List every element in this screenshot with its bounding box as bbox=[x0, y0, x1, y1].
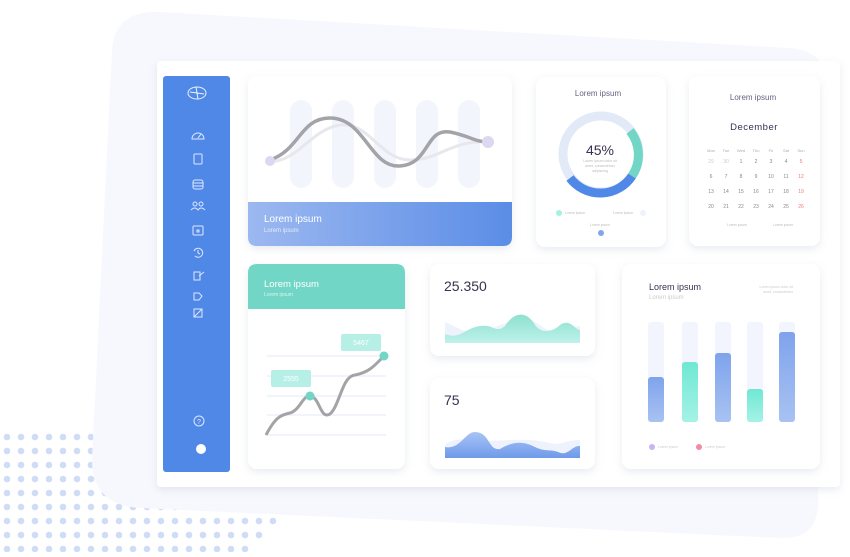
card: calendar: 21 bbox=[723, 204, 729, 210]
card: calendar: 12 bbox=[798, 174, 804, 180]
card: green line chart: Lorem ipsum bbox=[264, 279, 319, 290]
card: calendar: 7 bbox=[725, 174, 728, 180]
card: calendar: 17 bbox=[768, 189, 774, 195]
card: 25.350 area bbox=[430, 264, 595, 356]
card: calendar: Lorem ipsum bbox=[773, 223, 793, 227]
card: bar chart: Lorem ipsum bbox=[705, 445, 725, 449]
card: bar chart: Lorem ipsum dolor sit bbox=[760, 285, 793, 289]
dot pattern bbox=[0, 433, 280, 552]
card: calendar: 30 bbox=[723, 159, 729, 165]
card: line chart top: Lorem ipsum bbox=[264, 228, 299, 234]
card: calendar: 26 bbox=[798, 204, 804, 210]
card: calendar: 24 bbox=[768, 204, 774, 210]
card: calendar: 16 bbox=[753, 189, 759, 195]
icon: logo bbox=[188, 87, 206, 99]
icon: dot bbox=[196, 444, 206, 454]
card: calendar: 20 bbox=[708, 204, 714, 210]
card: donut: Lorem ipsum bbox=[613, 211, 633, 215]
card: calendar: 14 bbox=[723, 189, 729, 195]
card: calendar: 29 bbox=[708, 159, 714, 165]
sidebar bbox=[163, 76, 230, 472]
card: donut: Lorem ipsum dolor sit bbox=[583, 159, 617, 163]
card: calendar: Sun bbox=[797, 148, 805, 153]
dashboard frame bbox=[157, 61, 840, 487]
card: calendar: Lorem ipsum bbox=[727, 223, 747, 227]
card: calendar: 19 bbox=[798, 189, 804, 195]
card: calendar: 6 bbox=[710, 174, 713, 180]
text: card title: Lorem ipsum bbox=[264, 214, 322, 225]
card: donut: 45% bbox=[586, 142, 614, 158]
card: calendar: Tue bbox=[723, 148, 730, 153]
card: donut: Lorem ipsum bbox=[565, 211, 585, 215]
card: bar chart bbox=[622, 264, 820, 469]
card: bar chart: amet, consectetuer bbox=[763, 290, 794, 294]
card: calendar: 25 bbox=[783, 204, 789, 210]
card: donut: adipiscing bbox=[592, 169, 608, 173]
card: donut bbox=[536, 77, 666, 247]
card: calendar: 2 bbox=[755, 159, 758, 165]
card: calendar: Mon bbox=[707, 148, 715, 153]
card: 25.350 area: 25.350 bbox=[444, 278, 487, 294]
card: calendar: 1 bbox=[740, 159, 743, 165]
card: calendar: Sat bbox=[783, 148, 790, 153]
card: calendar: 15 bbox=[738, 189, 744, 195]
card: 75 area bbox=[430, 378, 595, 469]
icon: help bbox=[194, 416, 204, 426]
card: green line chart bbox=[248, 264, 405, 469]
card: bar chart: Lorem ipsum bbox=[649, 282, 701, 292]
card: calendar: 3 bbox=[770, 159, 773, 165]
card: calendar: 11 bbox=[783, 174, 789, 180]
card: calendar: December bbox=[730, 122, 778, 133]
card: bar chart: Lorem ipsum bbox=[649, 295, 684, 301]
card: donut: Lorem ipsum bbox=[575, 89, 621, 98]
sidebar icons bbox=[191, 133, 205, 317]
card: calendar: Thu bbox=[753, 148, 759, 153]
card: calendar: Wed bbox=[737, 148, 745, 153]
card: calendar: 23 bbox=[753, 204, 759, 210]
card: line chart top bbox=[248, 76, 512, 246]
card: 75 area: 75 bbox=[444, 392, 460, 408]
card: green line chart: 2555 bbox=[283, 376, 299, 383]
card: calendar: Fri bbox=[769, 148, 773, 153]
card: calendar: 10 bbox=[768, 174, 774, 180]
card: calendar: 5 bbox=[800, 159, 803, 165]
card: bar chart: Lorem ipsum bbox=[658, 445, 678, 449]
card: green line chart: 5467 bbox=[353, 340, 369, 347]
card: calendar: 4 bbox=[785, 159, 788, 165]
card: donut: amet, consectetuer bbox=[585, 164, 616, 168]
card: calendar: Lorem ipsum bbox=[730, 93, 776, 102]
card: calendar: 22 bbox=[738, 204, 744, 210]
card: green line chart: Lorem ipsum bbox=[264, 292, 293, 298]
card: calendar bbox=[689, 76, 820, 246]
card: calendar: 13 bbox=[708, 189, 714, 195]
card: calendar: 18 bbox=[783, 189, 789, 195]
card: donut: Lorem ipsum bbox=[590, 223, 610, 227]
card: calendar: 8 bbox=[740, 174, 743, 180]
card: calendar: 9 bbox=[755, 174, 758, 180]
icon: help: ? bbox=[197, 419, 201, 426]
